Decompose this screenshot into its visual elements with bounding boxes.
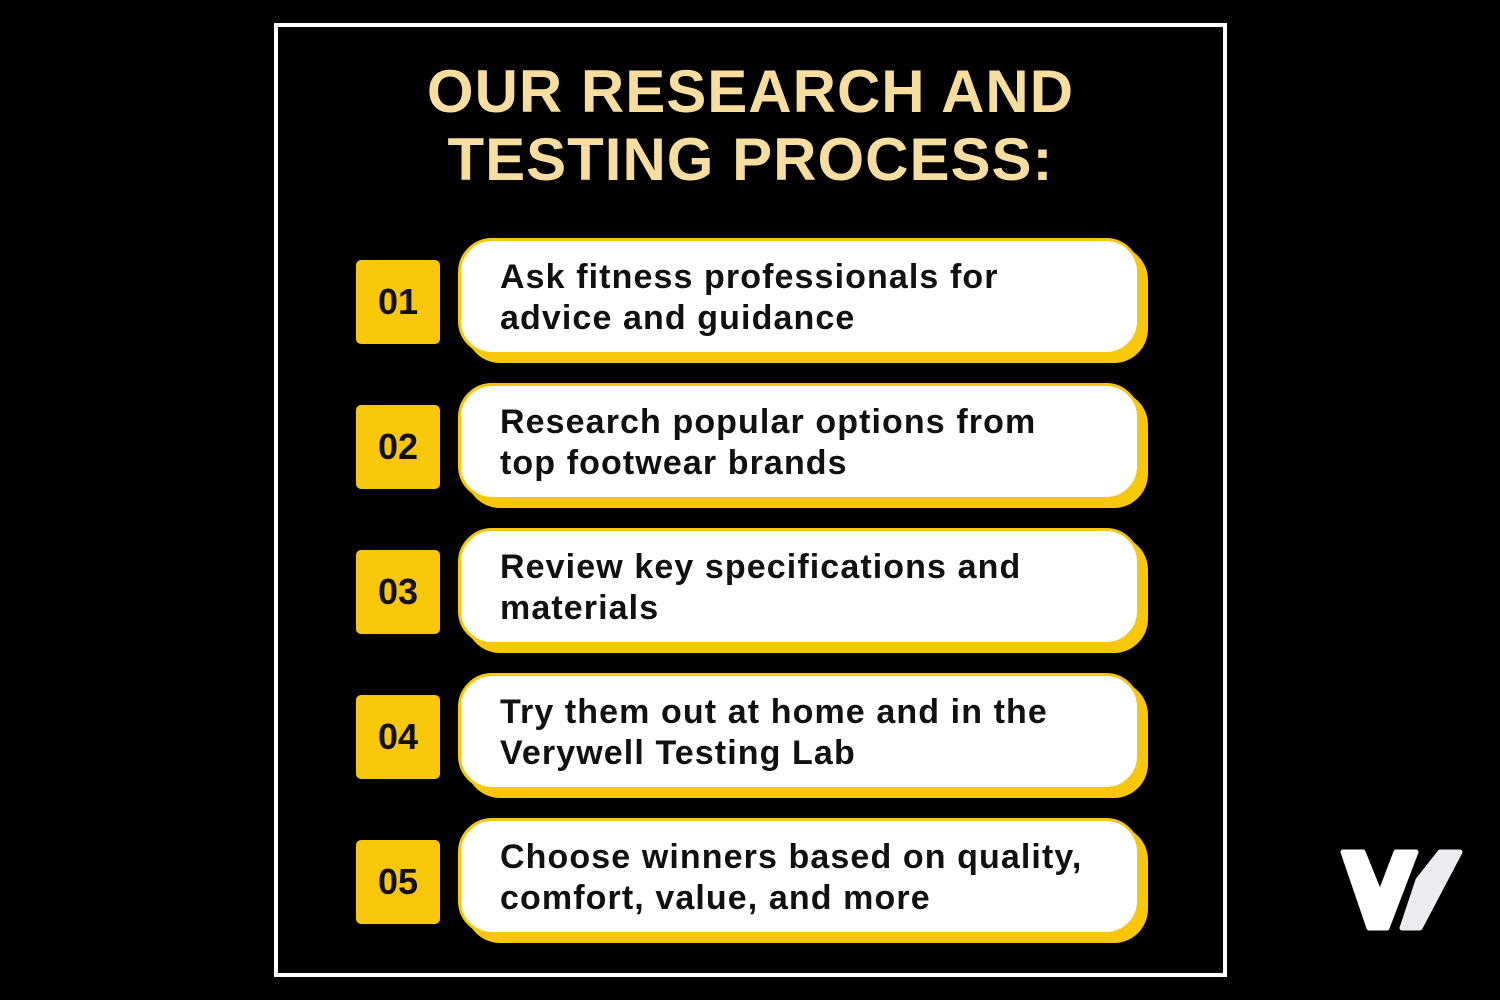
- number 04: [356, 695, 440, 779]
- step 03: [356, 528, 1148, 653]
- number 05: 05: [378, 861, 418, 902]
- step text: Try them out at home and in the: [500, 693, 1048, 731]
- number 01: [356, 260, 440, 344]
- step text: [500, 838, 1082, 917]
- card: [458, 818, 1140, 935]
- step 05: [356, 818, 1148, 943]
- card shadow: [466, 391, 1148, 508]
- step text: Ask fitness professionals for: [500, 258, 999, 296]
- step text: comfort, value, and more: [500, 879, 931, 917]
- number 02: [356, 405, 440, 489]
- number 01: 01: [378, 281, 418, 322]
- step text: advice and guidance: [500, 299, 855, 337]
- card shadow: [466, 681, 1148, 798]
- card shadow: [466, 536, 1148, 653]
- step text: [500, 548, 1021, 627]
- step text: [500, 258, 999, 337]
- step text: Choose winners based on quality,: [500, 838, 1082, 876]
- number 04: 04: [378, 716, 418, 757]
- number 05: [356, 840, 440, 924]
- step text: Verywell Testing Lab: [500, 734, 856, 772]
- title: OUR RESEARCH AND: [427, 58, 1074, 125]
- card: [458, 673, 1140, 790]
- card: [458, 238, 1140, 355]
- number 02: 02: [378, 426, 418, 467]
- card: [458, 528, 1140, 645]
- number 03: [356, 550, 440, 634]
- step 04: [356, 673, 1148, 798]
- step text: Research popular options from: [500, 403, 1036, 441]
- card: [458, 383, 1140, 500]
- number 03: 03: [378, 571, 418, 612]
- card shadow: [466, 246, 1148, 363]
- title: [427, 58, 1074, 193]
- step 02: [356, 383, 1148, 508]
- step text: top footwear brands: [500, 444, 848, 482]
- step text: materials: [500, 589, 659, 627]
- card shadow: [466, 826, 1148, 943]
- step text: [500, 403, 1036, 482]
- title: TESTING PROCESS:: [447, 126, 1054, 193]
- step text: Review key specifications and: [500, 548, 1021, 586]
- step text: [500, 693, 1048, 772]
- step 01: [356, 238, 1148, 363]
- frame: [274, 23, 1227, 977]
